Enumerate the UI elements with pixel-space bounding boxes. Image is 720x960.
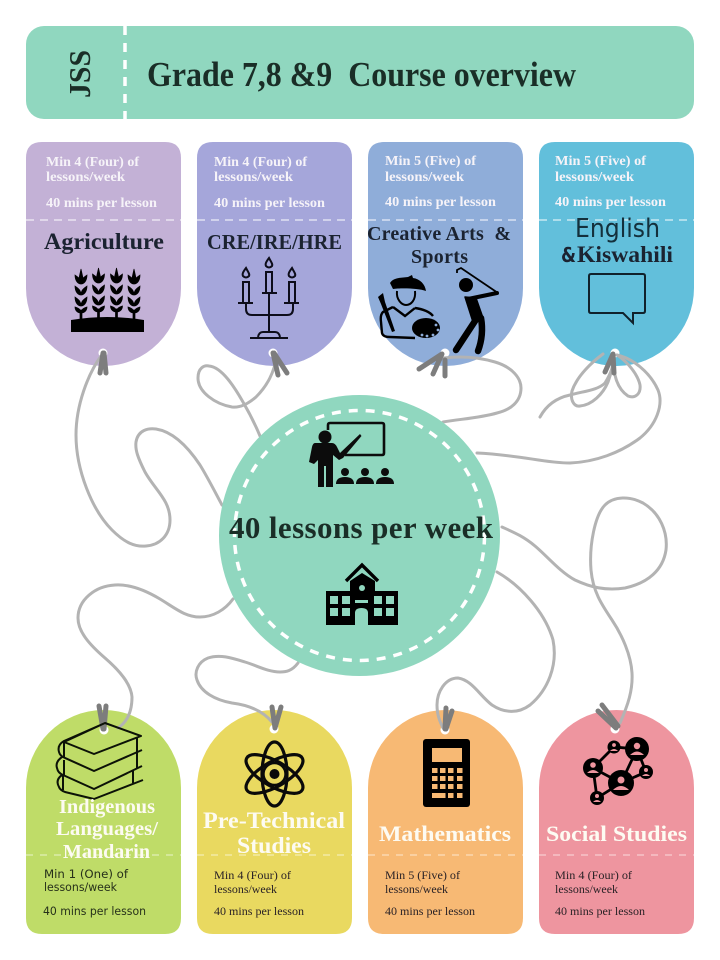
heading: Pre-Technical [203,808,345,833]
JSS vertical label: JSS [62,50,97,98]
central circle [219,395,500,676]
header banner [26,26,694,119]
bottom tag content: Indigenous Languages/Mandarin: Languages/ [56,818,158,840]
icon: painter [378,275,440,338]
bottom tag content: Mathematics [379,739,511,918]
tag: CRE/IRE/HRE: lessons/week [214,170,293,185]
label: 40 lessons per week [229,510,494,545]
tag: Agriculture: 40 mins per lesson [46,196,157,211]
icon: atom [241,742,308,806]
heading: Creative Arts & [367,223,511,245]
icon: golfer [456,268,498,351]
lesson info: Min 5 (Five) of [385,154,476,169]
tag: CRE/IRE/HRE: 40 mins per lesson [214,196,325,211]
tag: English & Kiswahili: lessons/week [555,170,634,185]
tag: English & Kiswahili [539,142,694,366]
lesson info: Min 1 (One) of [44,867,129,881]
string clips [99,353,618,729]
heading: CRE/IRE/HRE [207,230,342,254]
bottom tag content: Pre-Technical Studies: 40 mins per lesson [214,904,304,918]
tag: Creative Arts & Sports: lessons/week [385,170,464,185]
bottom tag content: Indigenous Languages/Mandarin: lessons/week [44,880,117,894]
bottom tag content: Mathematics: 40 mins per lesson [385,904,475,918]
tag: English & Kiswahili: 40 mins per lesson [555,195,666,210]
lesson info: Min 4 (Four) of [555,868,632,882]
icon: school [326,565,398,625]
icon: candelabra [238,258,299,338]
tag: English & Kiswahili: Kiswahili [577,242,674,267]
tag: Mathematics [368,710,523,934]
tag: Creative Arts & Sports: Sports [411,246,468,268]
heading: English [575,214,660,244]
tag: CRE/IRE/HRE [197,142,352,366]
bottom tag content: Mathematics: lessons/week [385,882,448,896]
tag: Social Studies [539,710,694,934]
tag: Agriculture: lessons/week [46,170,125,185]
bottom tag content: Indigenous Languages/Mandarin [43,723,158,918]
bottom tag content: Indigenous Languages/Mandarin: Mandarin [63,841,150,863]
icon: wheat [71,268,144,332]
lesson info: Min 5 (Five) of [385,868,460,882]
lesson info: Min 4 (Four) of [214,868,291,882]
tag: Creative Arts & Sports: 40 mins per lesson [385,195,496,210]
tag: Creative Arts & Sports [367,142,523,366]
bottom tag content: Social Studies: lessons/week [555,882,618,896]
icon: people network [583,737,653,805]
connecting strings [76,354,666,728]
heading: Mathematics [379,821,511,846]
bottom tag content: Indigenous Languages/Mandarin: 40 mins per lesson [43,904,146,918]
tag: Agriculture [26,142,181,366]
heading: Social Studies [546,821,687,846]
bottom tag content: Social Studies [546,737,687,918]
heading: Agriculture [44,229,164,254]
icon: books [57,723,143,799]
lesson info: Min 4 (Four) of [214,155,307,170]
bottom tag content: Social Studies: 40 mins per lesson [555,904,645,918]
title: Grade 7,8 &9 Course overview [147,55,577,94]
icon: teacher at board [309,423,394,487]
bottom tag content: Pre-Technical Studies: Studies [237,833,311,858]
tag: English & Kiswahili: & [561,243,576,267]
bottom tag content: Pre-Technical Studies [203,742,345,918]
lesson info: Min 5 (Five) of [555,154,646,169]
heading: Indigenous [59,796,155,818]
tag: Pre-Technical Studies [197,710,352,934]
tag: Indigenous Languages/Mandarin [26,710,181,934]
icon: calculator [423,739,470,807]
bottom tag content: Pre-Technical Studies: lessons/week [214,882,277,896]
lesson info: Min 4 (Four) of [46,155,139,170]
icon: speech bubble [589,274,645,323]
